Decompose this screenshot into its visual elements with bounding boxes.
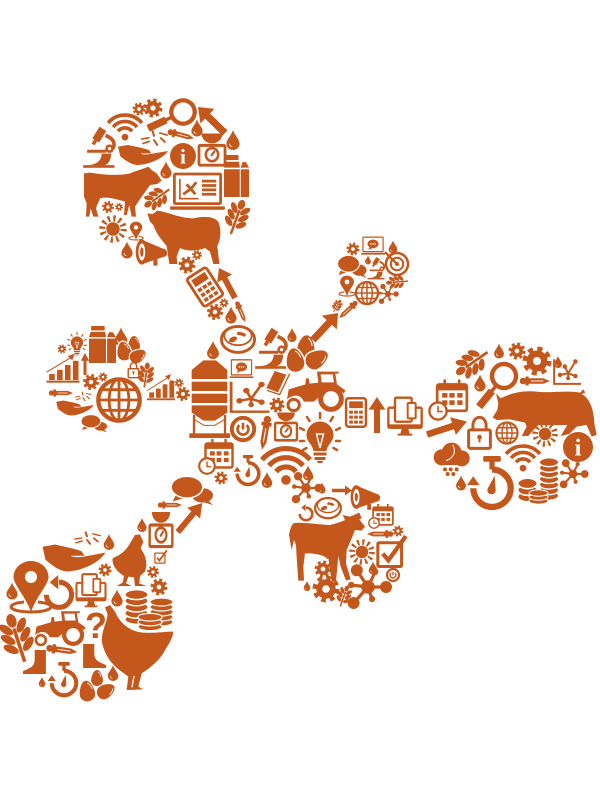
icon: network: [292, 472, 323, 503]
icon: gear: [271, 399, 283, 411]
icon: location pin: [11, 561, 51, 612]
connector spoke: right: [346, 397, 422, 436]
arrow: up-left: [191, 100, 232, 140]
icon: drop: [456, 476, 466, 490]
icon: gear: [99, 373, 107, 381]
icon: sun: [102, 218, 124, 240]
icon: hand: [118, 145, 168, 165]
icon: wheat: [385, 274, 409, 290]
icon: network: [560, 459, 589, 488]
icon: globe: [496, 422, 518, 444]
icon: scale: [275, 412, 297, 440]
icon: clock: [369, 518, 379, 528]
icon: line chart: [231, 382, 270, 412]
icon: question mark: ?: [85, 605, 107, 646]
icon: stopwatch: [48, 662, 76, 695]
icon: wheat: [135, 361, 157, 389]
icon: boot: [23, 650, 46, 674]
icon: petri dish: [221, 326, 255, 352]
icon: magnifier: [148, 92, 198, 142]
icon: calf: [289, 513, 365, 582]
icon: coin stack: [138, 613, 162, 631]
icon: drop: [207, 341, 219, 359]
icon: gear: [58, 345, 66, 353]
icon: drop: [104, 534, 114, 550]
icon: gear: [193, 251, 201, 259]
icon: egg: [94, 679, 118, 703]
icon: light bulb: [300, 413, 340, 463]
icon: globe: [356, 282, 378, 304]
icon: wheat leaf: [139, 181, 175, 215]
icon: laptop with chart: [170, 174, 225, 210]
icon: refresh: [46, 575, 72, 607]
icon: scale: [150, 512, 172, 547]
icon: bar chart: [147, 374, 175, 400]
icon: monitor and devices: [76, 574, 106, 607]
icon: laptop with speech: [230, 360, 254, 378]
icon: coin stack: [529, 490, 548, 504]
icon: gear: [510, 344, 524, 358]
icon: drop: [494, 344, 504, 358]
icon: coin stack: [125, 590, 148, 624]
icon: pig: [493, 389, 597, 437]
icon: milk carton: [224, 155, 249, 197]
arrow: right: [332, 485, 352, 496]
icon: tractor: [35, 611, 85, 645]
icon: clock: [199, 458, 215, 474]
icon: sun: [535, 424, 555, 444]
icon: stopwatch: [234, 455, 259, 484]
icon: egg: [283, 346, 307, 374]
cluster: beef cattle: [83, 92, 255, 272]
icon: egg: [77, 679, 97, 703]
icon: information: [170, 143, 196, 169]
icon: bull: [147, 211, 220, 264]
icon: speech bubbles: [81, 415, 107, 432]
icon: microscope: [367, 258, 384, 279]
icon: megaphone: [136, 239, 167, 266]
icon: hen: [102, 605, 173, 690]
icon: calculator: [346, 398, 366, 427]
icon: gear: [148, 567, 158, 577]
icon: coin stack: [150, 598, 173, 626]
cluster: central hub: [189, 299, 359, 503]
icon: drop: [474, 374, 486, 392]
icon: rain cloud: [434, 443, 470, 476]
icon: magnifier: [475, 363, 519, 407]
icon: padlock: [128, 363, 139, 378]
icon: gear: [152, 580, 166, 594]
icon: refresh: [300, 504, 312, 520]
connector spoke: top: [186, 264, 248, 324]
icon: wheat: [0, 609, 42, 667]
icon: laptop with speech: [361, 237, 385, 255]
icon: pipette: [337, 299, 359, 321]
cluster: poultry: [0, 532, 173, 703]
icon: pipette: [49, 389, 73, 397]
icon: speech bubbles: [338, 255, 366, 278]
icon: petri dish: [315, 498, 341, 518]
icon: drop: [137, 518, 147, 532]
icon: drop: [318, 482, 326, 494]
icon: milk carton: [89, 326, 116, 363]
icon: egg: [128, 336, 140, 352]
icon: drop: [369, 562, 377, 574]
icon: drop: [111, 590, 123, 606]
icon: small gear: [134, 104, 144, 114]
icon: information: [563, 432, 593, 462]
icon: gear: [180, 258, 194, 272]
icon: egg: [115, 340, 133, 362]
icon: bar chart: [46, 354, 80, 383]
icon: silo: [189, 360, 230, 438]
icon: padlock: [469, 417, 490, 448]
icon: calendar: [437, 380, 467, 411]
icon: drop: [160, 162, 172, 178]
arrow: up right: [171, 498, 209, 537]
icon: seeds: [76, 392, 91, 401]
icon: coin stack tall: [540, 458, 558, 500]
icon: drop: [304, 581, 310, 591]
icon: hand: [56, 400, 94, 415]
icon: seeds: [75, 532, 100, 544]
icon: power button: [232, 418, 254, 440]
arrow: right: [424, 413, 470, 443]
icon: location pin: [339, 276, 355, 296]
icon: egg: [127, 346, 149, 366]
icon: drop: [108, 665, 118, 681]
icon: egg: [301, 345, 333, 373]
icon: network: [348, 564, 392, 609]
icon: checkbox: [378, 536, 406, 567]
icon: wheat: [449, 341, 495, 385]
cluster: top right small: [329, 237, 409, 315]
icon: drop: [262, 472, 272, 488]
icon: gear: [325, 552, 331, 558]
icon: drop: [39, 677, 45, 687]
icon: megaphone: [351, 485, 380, 510]
icon: globe: [98, 379, 140, 421]
icon: gear: [116, 204, 122, 210]
icon: book: [266, 371, 290, 395]
icon: wifi: [108, 115, 142, 140]
icon: gear: [175, 379, 183, 387]
icon: location pin: [129, 222, 143, 240]
icon: egg: [295, 334, 317, 360]
icon: calculator: [186, 267, 224, 307]
icon: drop: [226, 130, 240, 150]
icon: drop: [191, 120, 203, 136]
icon: gear: [84, 375, 98, 389]
icon: pipette: [158, 501, 182, 509]
icon: sun: [352, 542, 372, 562]
icon: drop: [287, 328, 297, 342]
icon: calendar: [373, 504, 393, 525]
cluster: pig: [424, 341, 597, 507]
icon: gear: [348, 244, 358, 254]
icon: monitor and devices: [388, 398, 422, 436]
icon: pipette: [367, 530, 393, 538]
icon: egg: [91, 670, 103, 686]
icon: gear: [103, 202, 113, 212]
icon: drop: [303, 466, 313, 480]
icon: checkbox: [155, 550, 167, 563]
icon: wheat: [333, 583, 355, 609]
cluster: left small: [46, 326, 189, 432]
icon: drop: [6, 582, 18, 600]
icon: drop: [365, 256, 371, 264]
icon: pipette: [167, 128, 195, 142]
icon: pipette: [520, 376, 550, 386]
icon: gear: [177, 388, 189, 400]
icon: wifi: [262, 449, 310, 485]
icon: microscope: [83, 129, 115, 168]
icon: drop: [115, 328, 127, 346]
icon: drop: [121, 242, 133, 258]
icon: chicken: [113, 534, 147, 586]
icon: drop: [389, 240, 397, 254]
arrow: up: [369, 397, 385, 433]
icon: gear: [315, 578, 337, 600]
icon: line chart: [554, 359, 581, 384]
cluster: calf: [289, 482, 406, 609]
icon: boot: [83, 644, 106, 668]
icon: pipette: [234, 300, 248, 323]
icon: weighing scale: [199, 134, 225, 165]
icon: gear: [393, 526, 403, 536]
icon: gear: [100, 565, 110, 575]
icon: cow: [84, 167, 162, 217]
icon: microscope: [255, 330, 287, 369]
icon: hand: [42, 544, 106, 571]
icon: speech bubbles: [171, 476, 213, 505]
icon: wheat: [329, 297, 345, 315]
icon: drop: [225, 306, 237, 324]
icon: calendar: [206, 439, 232, 468]
connector spoke: lower left: [137, 476, 213, 563]
icon: gear: [220, 299, 228, 307]
icon: clock: [429, 402, 447, 420]
arrow: up: [81, 353, 89, 375]
icon: gear: [208, 305, 222, 319]
icon: gear: [316, 562, 330, 576]
icon: target: [385, 252, 408, 275]
icon: pipette: [46, 643, 78, 657]
icon: stopwatch: [467, 456, 511, 507]
icon: pipette: [257, 415, 273, 451]
icon: wheat: [219, 196, 255, 238]
icon: network: [379, 284, 399, 304]
icon: large gear: [145, 100, 161, 116]
icon: power button: [387, 569, 399, 581]
icon: wifi: [506, 446, 540, 471]
icon: drop: [554, 356, 562, 368]
arrow: up: [212, 264, 242, 302]
icon: gear: [216, 473, 226, 483]
icon: tractor: [287, 372, 345, 411]
icon: coin stack: [518, 478, 537, 502]
icon: gear: [525, 349, 549, 373]
icon: light bulb: [68, 332, 86, 356]
icon: seeds: [142, 131, 167, 145]
arrow: to top right: [306, 306, 345, 347]
